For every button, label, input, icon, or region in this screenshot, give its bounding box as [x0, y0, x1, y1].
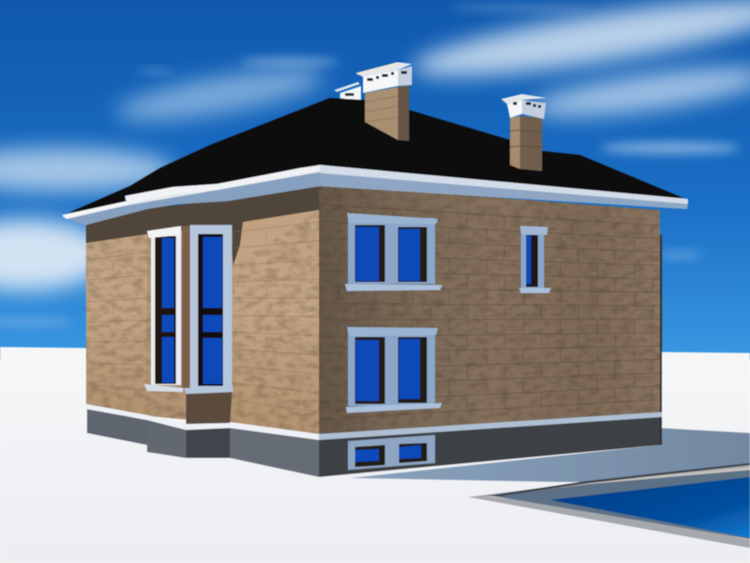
base trim band [86, 404, 662, 440]
clouds [0, 0, 750, 326]
window: bay left [144, 226, 183, 392]
brick courses: main side [319, 204, 660, 419]
wall: main side [319, 184, 660, 436]
wall: left section [86, 208, 148, 416]
swimming pool [468, 463, 750, 548]
sky [0, 0, 750, 360]
roof [66, 98, 688, 214]
wall: tan section [228, 186, 319, 436]
shadow on ground [350, 428, 750, 482]
ground [0, 347, 750, 563]
plinth: bay side [87, 408, 319, 477]
window: bay right [184, 225, 233, 394]
window: small upper [519, 226, 551, 293]
brick courses: left walls [86, 222, 319, 412]
window: lower double [346, 327, 442, 413]
masonry strip between bay windows [182, 226, 190, 388]
plinth: main side [319, 417, 660, 477]
cornice [62, 165, 688, 225]
shadow below bay sill [186, 392, 232, 424]
chimney: main [356, 62, 412, 141]
window: basement [348, 435, 435, 470]
wall texture [86, 184, 660, 436]
eave shadow on left walls [86, 186, 319, 266]
wall end edge [660, 235, 662, 445]
chimney: far left [334, 82, 361, 102]
window: upper double [345, 213, 442, 291]
chimney: right [501, 94, 547, 171]
wall: bay section [147, 200, 232, 424]
